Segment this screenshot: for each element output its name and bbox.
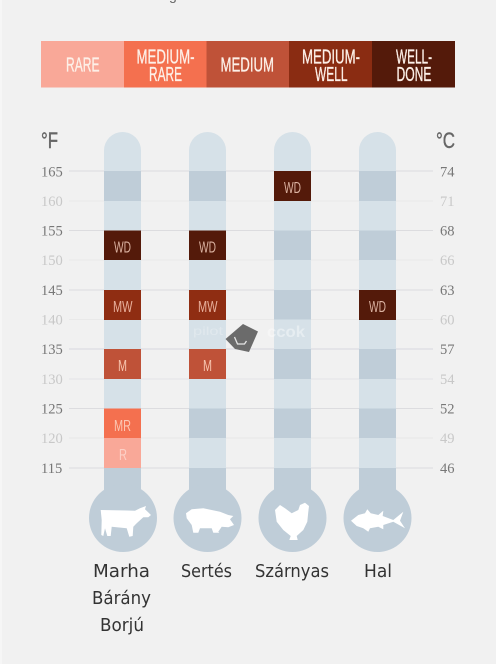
segment: well-done: WD bbox=[199, 240, 216, 256]
legend: medium-rare: MEDIUM- bbox=[136, 46, 194, 68]
thermometer: fish bbox=[344, 132, 412, 552]
fahrenheit axis: 160 bbox=[41, 194, 63, 210]
label: fish: Hal bbox=[364, 562, 392, 582]
fahrenheit axis: 150 bbox=[41, 253, 63, 269]
segment: medium: M bbox=[203, 358, 212, 375]
legend: rare bbox=[41, 41, 124, 88]
icon: pig bbox=[186, 508, 234, 533]
segment: well-done bbox=[104, 230, 141, 260]
segment: well-done bbox=[274, 171, 311, 201]
segment: well-done bbox=[359, 290, 396, 320]
legend: doneness scale bbox=[41, 41, 455, 88]
thermometer: pork bbox=[174, 132, 242, 552]
legend: rare: RARE bbox=[66, 54, 100, 76]
fahrenheit axis: 115 bbox=[41, 461, 62, 477]
fahrenheit axis: 135 bbox=[41, 342, 63, 358]
label: beef, lamb, veal: Borjú bbox=[100, 616, 144, 636]
legend: medium-well: MEDIUM- bbox=[302, 46, 360, 68]
segment: medium-rare: MR bbox=[114, 418, 131, 435]
celsius axis: 74 bbox=[440, 164, 455, 180]
watermark: pilot bbox=[193, 324, 224, 338]
fahrenheit unit: °F bbox=[41, 128, 58, 153]
label: beef, lamb, veal: Bárány bbox=[92, 589, 151, 609]
label: beef, lamb, veal: Marha bbox=[93, 562, 150, 582]
legend: medium-rare bbox=[124, 41, 206, 88]
fahrenheit axis: 155 bbox=[41, 224, 63, 240]
label: pork: Sertés bbox=[181, 562, 232, 582]
segment: rare: R bbox=[119, 447, 127, 464]
celsius axis: 60 bbox=[440, 312, 454, 328]
icon: cow bbox=[101, 506, 151, 537]
celsius axis bbox=[436, 128, 455, 477]
celsius unit: °C bbox=[436, 128, 455, 153]
celsius axis: 46 bbox=[440, 461, 454, 477]
legend: well-done bbox=[372, 41, 455, 88]
legend: medium: MEDIUM bbox=[220, 54, 274, 76]
segment: medium: M bbox=[118, 358, 127, 375]
watermark bbox=[193, 324, 305, 352]
segment: rare bbox=[104, 438, 141, 468]
segment: medium-well: MW bbox=[113, 299, 133, 316]
fahrenheit axis: 145 bbox=[41, 283, 63, 299]
label: poultry: Szárnyas bbox=[255, 562, 329, 582]
icon: chicken bbox=[275, 503, 309, 540]
celsius axis: 71 bbox=[440, 194, 454, 210]
fahrenheit axis: 140 bbox=[41, 312, 63, 328]
segment: medium-well bbox=[104, 290, 141, 320]
legend: medium-rare: RARE bbox=[149, 64, 182, 86]
segment: well-done: WD bbox=[114, 240, 131, 256]
fahrenheit axis: 130 bbox=[41, 372, 63, 388]
label: beef, lamb, veal bbox=[92, 562, 151, 636]
segment: medium-well: MW bbox=[198, 299, 218, 316]
segment: well-done bbox=[189, 230, 226, 260]
legend: medium-well bbox=[289, 41, 372, 88]
legend: medium bbox=[206, 41, 289, 88]
segment: well-done: WD bbox=[284, 180, 301, 197]
segment: medium-well bbox=[189, 290, 226, 320]
celsius axis: 66 bbox=[440, 253, 454, 269]
segment: medium bbox=[104, 349, 141, 379]
legend: medium-well: WELL bbox=[315, 64, 348, 86]
celsius axis: 49 bbox=[440, 431, 454, 447]
watermark: ccok bbox=[267, 324, 305, 341]
fahrenheit axis: 120 bbox=[41, 431, 63, 447]
fahrenheit axis: 125 bbox=[41, 402, 63, 418]
celsius axis: 68 bbox=[440, 224, 454, 240]
fahrenheit axis: 165 bbox=[41, 164, 63, 180]
celsius axis: 52 bbox=[440, 402, 454, 418]
segment: medium bbox=[189, 349, 226, 379]
celsius axis: 57 bbox=[440, 342, 454, 358]
celsius axis: 63 bbox=[440, 283, 454, 299]
fahrenheit axis bbox=[41, 128, 63, 477]
thermometer: poultry bbox=[258, 132, 326, 552]
celsius axis: 54 bbox=[440, 372, 455, 388]
thermometer: beef, lamb, veal bbox=[89, 132, 157, 552]
icon: fish bbox=[351, 509, 405, 532]
legend: well-done: DONE bbox=[396, 64, 432, 86]
segment: well-done: WD bbox=[369, 299, 386, 316]
legend: well-done: WELL- bbox=[396, 46, 432, 68]
segment: medium-rare bbox=[104, 408, 141, 438]
